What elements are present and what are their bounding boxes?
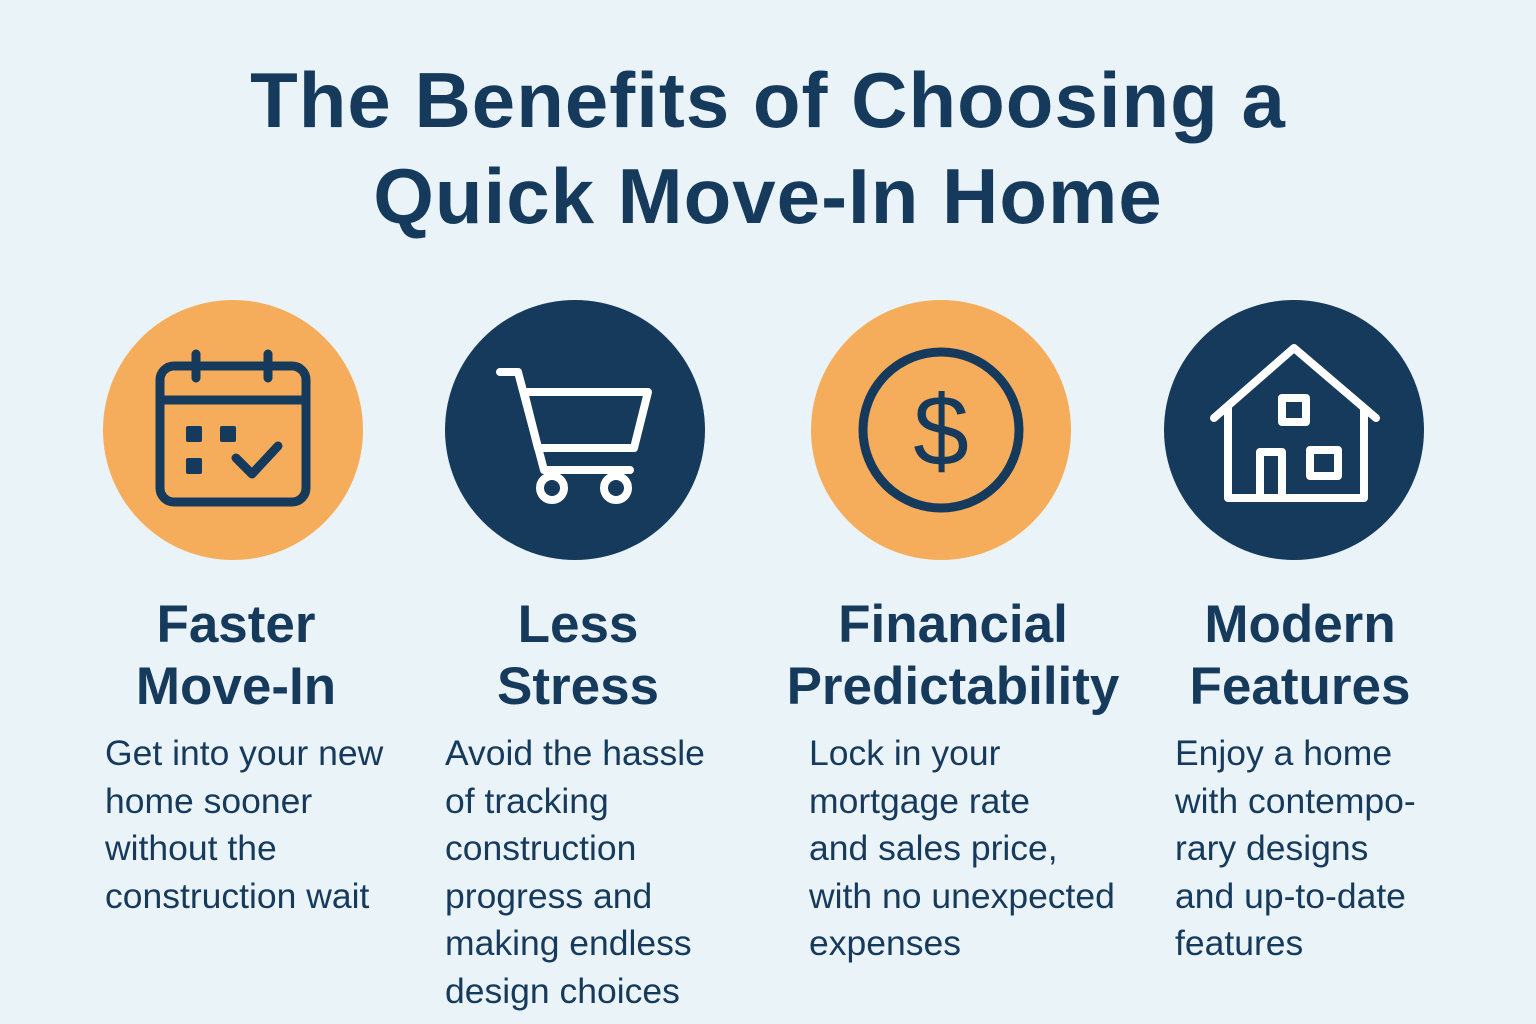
heading: faster move-in: Move-In bbox=[136, 657, 336, 716]
text: financial predictability: with no unexpected bbox=[809, 876, 1115, 916]
heading: less stress: Less bbox=[518, 595, 638, 654]
heading: financial predictability: Financial bbox=[838, 595, 1068, 654]
text: less stress: Avoid the hassle bbox=[445, 733, 705, 773]
text: less stress: construction bbox=[445, 828, 636, 868]
text: less stress: design choices bbox=[445, 971, 680, 1011]
title: Quick Move-In Home bbox=[373, 152, 1163, 240]
heading: less stress: Stress bbox=[497, 657, 659, 716]
icon: house bbox=[1164, 300, 1424, 560]
heading: financial predictability: Predictability bbox=[787, 657, 1119, 716]
text: less stress: progress and bbox=[445, 876, 652, 916]
heading: faster move-in: Faster bbox=[156, 595, 316, 654]
icon: dollar coin bbox=[811, 300, 1071, 560]
icon: shopping cart bbox=[445, 300, 705, 560]
icon: calendar bbox=[103, 300, 363, 560]
text: less stress: making endless bbox=[445, 923, 692, 963]
heading: less stress bbox=[497, 595, 659, 716]
text: faster move-in: without the bbox=[105, 828, 277, 868]
heading: financial predictability bbox=[787, 595, 1119, 716]
text: faster move-in: home sooner bbox=[105, 781, 312, 821]
title bbox=[250, 56, 1286, 240]
text: financial predictability bbox=[809, 733, 1115, 963]
text: faster move-in bbox=[105, 733, 384, 916]
text: modern features: Enjoy a home bbox=[1175, 733, 1392, 773]
text: modern features bbox=[1175, 733, 1416, 963]
title: The Benefits of Choosing a bbox=[250, 56, 1286, 144]
text: faster move-in: construction wait bbox=[105, 876, 369, 916]
text: modern features: rary designs bbox=[1175, 828, 1368, 868]
text: financial predictability: and sales price, bbox=[809, 828, 1058, 868]
text: modern features: with contempo- bbox=[1175, 781, 1416, 821]
text: less stress: of tracking bbox=[445, 781, 609, 821]
icon: dollar coin: $ bbox=[913, 375, 969, 487]
heading: modern features: Features bbox=[1190, 657, 1410, 716]
heading: faster move-in bbox=[136, 595, 336, 716]
text: financial predictability: Lock in your bbox=[809, 733, 1000, 773]
text: modern features: and up-to-date bbox=[1175, 876, 1406, 916]
text: less stress bbox=[445, 733, 705, 1011]
text: financial predictability: mortgage rate bbox=[809, 781, 1030, 821]
text: faster move-in: Get into your new bbox=[105, 733, 383, 773]
heading: modern features bbox=[1190, 595, 1410, 716]
text: modern features: features bbox=[1175, 923, 1303, 963]
heading: modern features: Modern bbox=[1204, 595, 1396, 654]
text: financial predictability: expenses bbox=[809, 923, 961, 963]
